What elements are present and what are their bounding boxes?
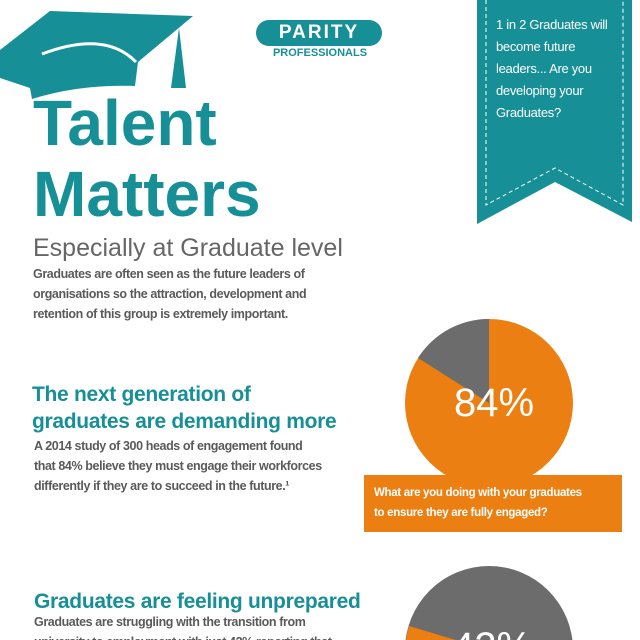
callout: orange box — [364, 475, 622, 532]
title — [33, 87, 261, 230]
text: unprepared: Graduates are struggling with the transition from — [34, 615, 305, 629]
heading: unprepared: Graduates are feeling unprepared — [34, 590, 361, 613]
intro text: organisations so the attraction, development and — [33, 287, 306, 301]
text: study: that 84% believe they must engage their workforces — [34, 459, 322, 473]
heading: next generation: The next generation of — [32, 383, 251, 406]
title: Talent — [33, 87, 217, 159]
icon: graduation cap — [0, 11, 193, 99]
intro text: Graduates are often seen as the future leaders of — [33, 267, 304, 281]
subtitle: Especially at Graduate level — [33, 234, 343, 262]
pie chart 84% — [405, 319, 573, 475]
ribbon callout: 1 in 2 Graduates will become future leaders... Are you developing your Graduates? — [496, 17, 607, 120]
intro text: retention of this group is extremely important. — [33, 307, 288, 321]
logo: PARITY — [279, 22, 359, 43]
heading: next generation — [32, 383, 336, 433]
pie chart 84%: 84% — [454, 381, 534, 425]
pie chart 42% — [406, 566, 572, 640]
text: study: A 2014 study of 300 heads of engagement found — [34, 439, 302, 453]
text: unprepared — [34, 615, 332, 640]
intro text — [33, 267, 306, 321]
text: study: differently if they are to succeed in the future.¹ — [34, 479, 289, 493]
heading: next generation: graduates are demanding more — [32, 410, 336, 433]
callout: orange box: What are you doing with your graduates — [374, 487, 582, 499]
title: Matters — [33, 158, 261, 230]
logo — [256, 20, 382, 59]
logo: PROFESSIONALS — [273, 47, 367, 59]
ribbon callout — [477, 0, 632, 224]
callout: orange box: to ensure they are fully engaged? — [374, 507, 548, 519]
text: study — [34, 439, 322, 493]
